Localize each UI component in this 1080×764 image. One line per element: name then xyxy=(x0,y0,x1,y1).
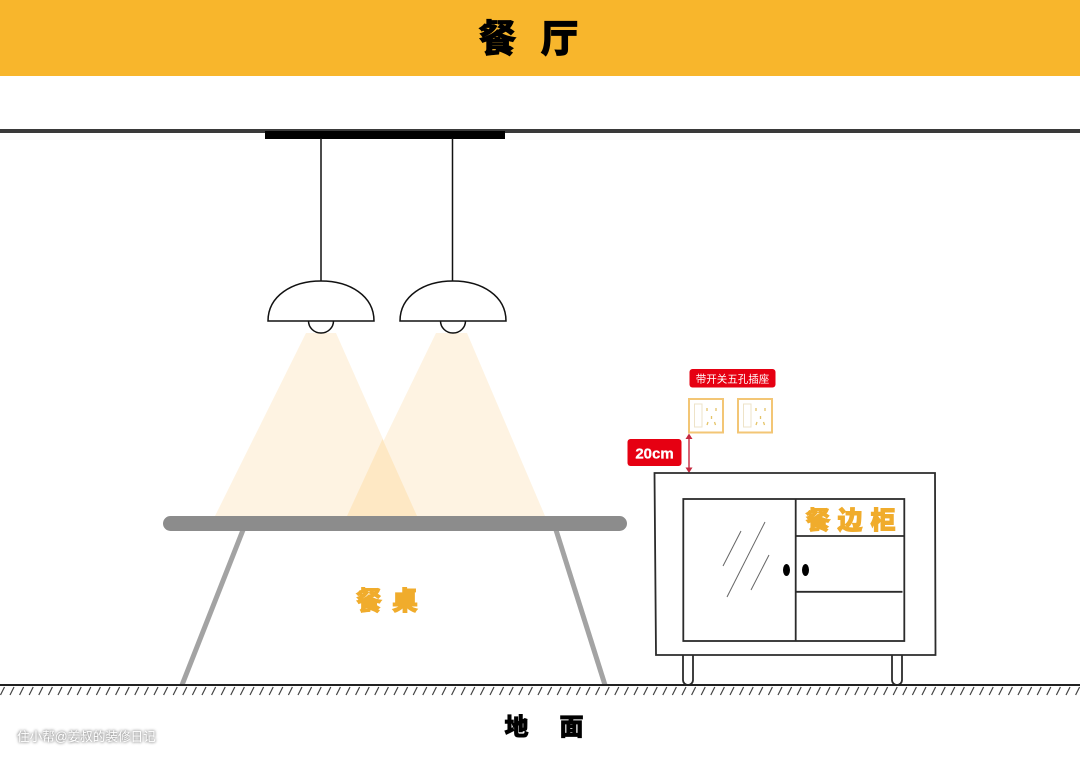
watermark: 住小帮@姜叔的装修日记 xyxy=(17,730,156,744)
height label: 20cm: 20cm xyxy=(635,446,674,462)
pendant lamp: left xyxy=(268,138,374,333)
label: floor xyxy=(504,707,584,742)
label: dining table xyxy=(356,581,418,618)
header band xyxy=(0,0,1080,76)
socket: left xyxy=(689,399,723,432)
light cones xyxy=(215,333,545,516)
ceiling mount bar xyxy=(265,131,505,139)
light cone: right xyxy=(347,333,545,516)
sideboard doors and shelves xyxy=(683,499,904,641)
ceiling line xyxy=(0,129,1080,133)
label: floor: 面 xyxy=(560,707,584,742)
label: dining table: 餐 xyxy=(356,581,382,618)
ground hatching xyxy=(0,687,1080,695)
sideboard body xyxy=(654,473,936,655)
sideboard xyxy=(654,473,936,685)
sideboard legs xyxy=(683,655,902,685)
height dimension arrow xyxy=(686,434,692,473)
label: sideboard xyxy=(805,501,896,537)
title xyxy=(478,8,579,63)
ground line xyxy=(0,684,1080,686)
height label: 20cm xyxy=(628,439,682,466)
label: sideboard: 餐 xyxy=(805,501,831,537)
light cone overlap xyxy=(347,439,417,516)
socket label xyxy=(690,369,776,388)
table legs xyxy=(182,530,605,685)
socket label: 带开关五孔插座 xyxy=(696,372,769,386)
pendant lamp: right xyxy=(400,138,506,333)
socket: right xyxy=(738,399,772,432)
title: 餐 xyxy=(478,8,517,63)
title: 厅 xyxy=(540,8,579,63)
glass reflection lines xyxy=(723,522,769,597)
label: dining table: 桌 xyxy=(392,581,418,618)
label: sideboard: 边 xyxy=(837,501,863,537)
dining table xyxy=(163,516,627,685)
light cone: left xyxy=(215,333,417,516)
door handles xyxy=(783,564,809,576)
label: sideboard: 柜 xyxy=(870,501,896,537)
table top xyxy=(163,516,627,531)
label: floor: 地 xyxy=(504,707,528,742)
